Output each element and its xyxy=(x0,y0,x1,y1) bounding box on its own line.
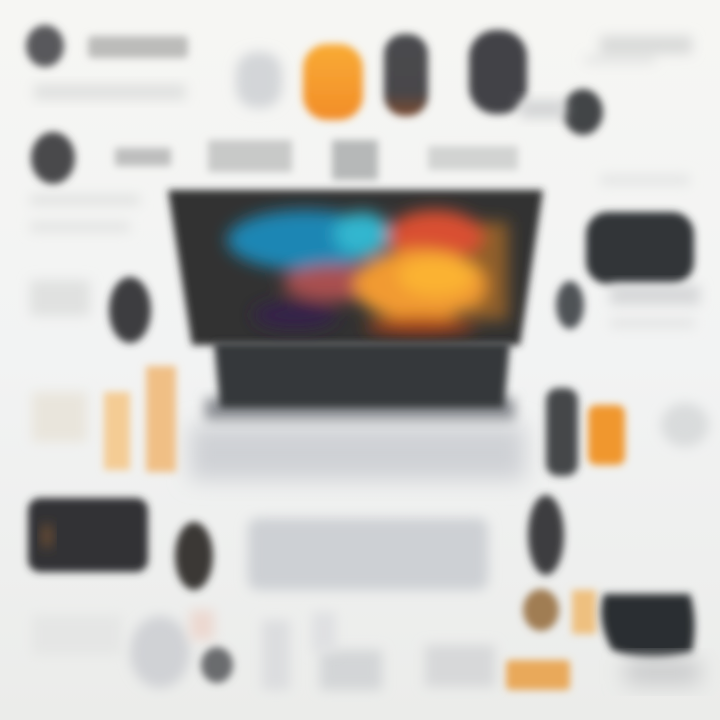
top row: white device xyxy=(236,52,282,108)
right device shadow xyxy=(610,285,700,305)
right pale icon xyxy=(661,403,709,447)
right orange block xyxy=(588,405,625,465)
keyboard panel xyxy=(248,518,488,590)
bottom orange label xyxy=(506,660,570,690)
right dark tall device xyxy=(546,388,578,476)
left text block xyxy=(30,195,140,442)
bottom-left text block xyxy=(32,615,122,655)
right dark device xyxy=(586,212,694,284)
laptop keyboard xyxy=(214,342,510,408)
laptop reflection xyxy=(190,425,525,480)
bottom-left dark panel xyxy=(28,498,148,572)
left dark device xyxy=(109,277,151,343)
top row: dark round icon xyxy=(563,89,603,135)
left orange bars xyxy=(104,366,176,472)
bottom orange icons xyxy=(523,589,596,634)
bottom-right panel shadow xyxy=(625,660,700,684)
bottom-left dark device xyxy=(175,522,213,590)
top row: dark device xyxy=(384,34,428,116)
second row icon xyxy=(31,132,75,184)
laptop xyxy=(168,190,543,480)
top-left icon and heading xyxy=(26,25,188,100)
laptop shadow xyxy=(205,398,515,420)
right text block xyxy=(600,175,695,328)
top row: orange device xyxy=(303,44,363,120)
bottom icons row xyxy=(130,610,495,690)
top-right text block xyxy=(585,36,692,64)
bottom-right dark panel xyxy=(601,594,695,658)
top row: large dark device xyxy=(469,30,527,114)
laptop screen xyxy=(227,210,508,335)
right small dark icon xyxy=(556,281,584,329)
laptop lid xyxy=(168,190,543,345)
bottom-left panel orange accent xyxy=(42,525,52,547)
top connector shadow xyxy=(520,100,565,118)
bottom dark tall device xyxy=(528,495,564,575)
second row labels xyxy=(115,140,518,180)
